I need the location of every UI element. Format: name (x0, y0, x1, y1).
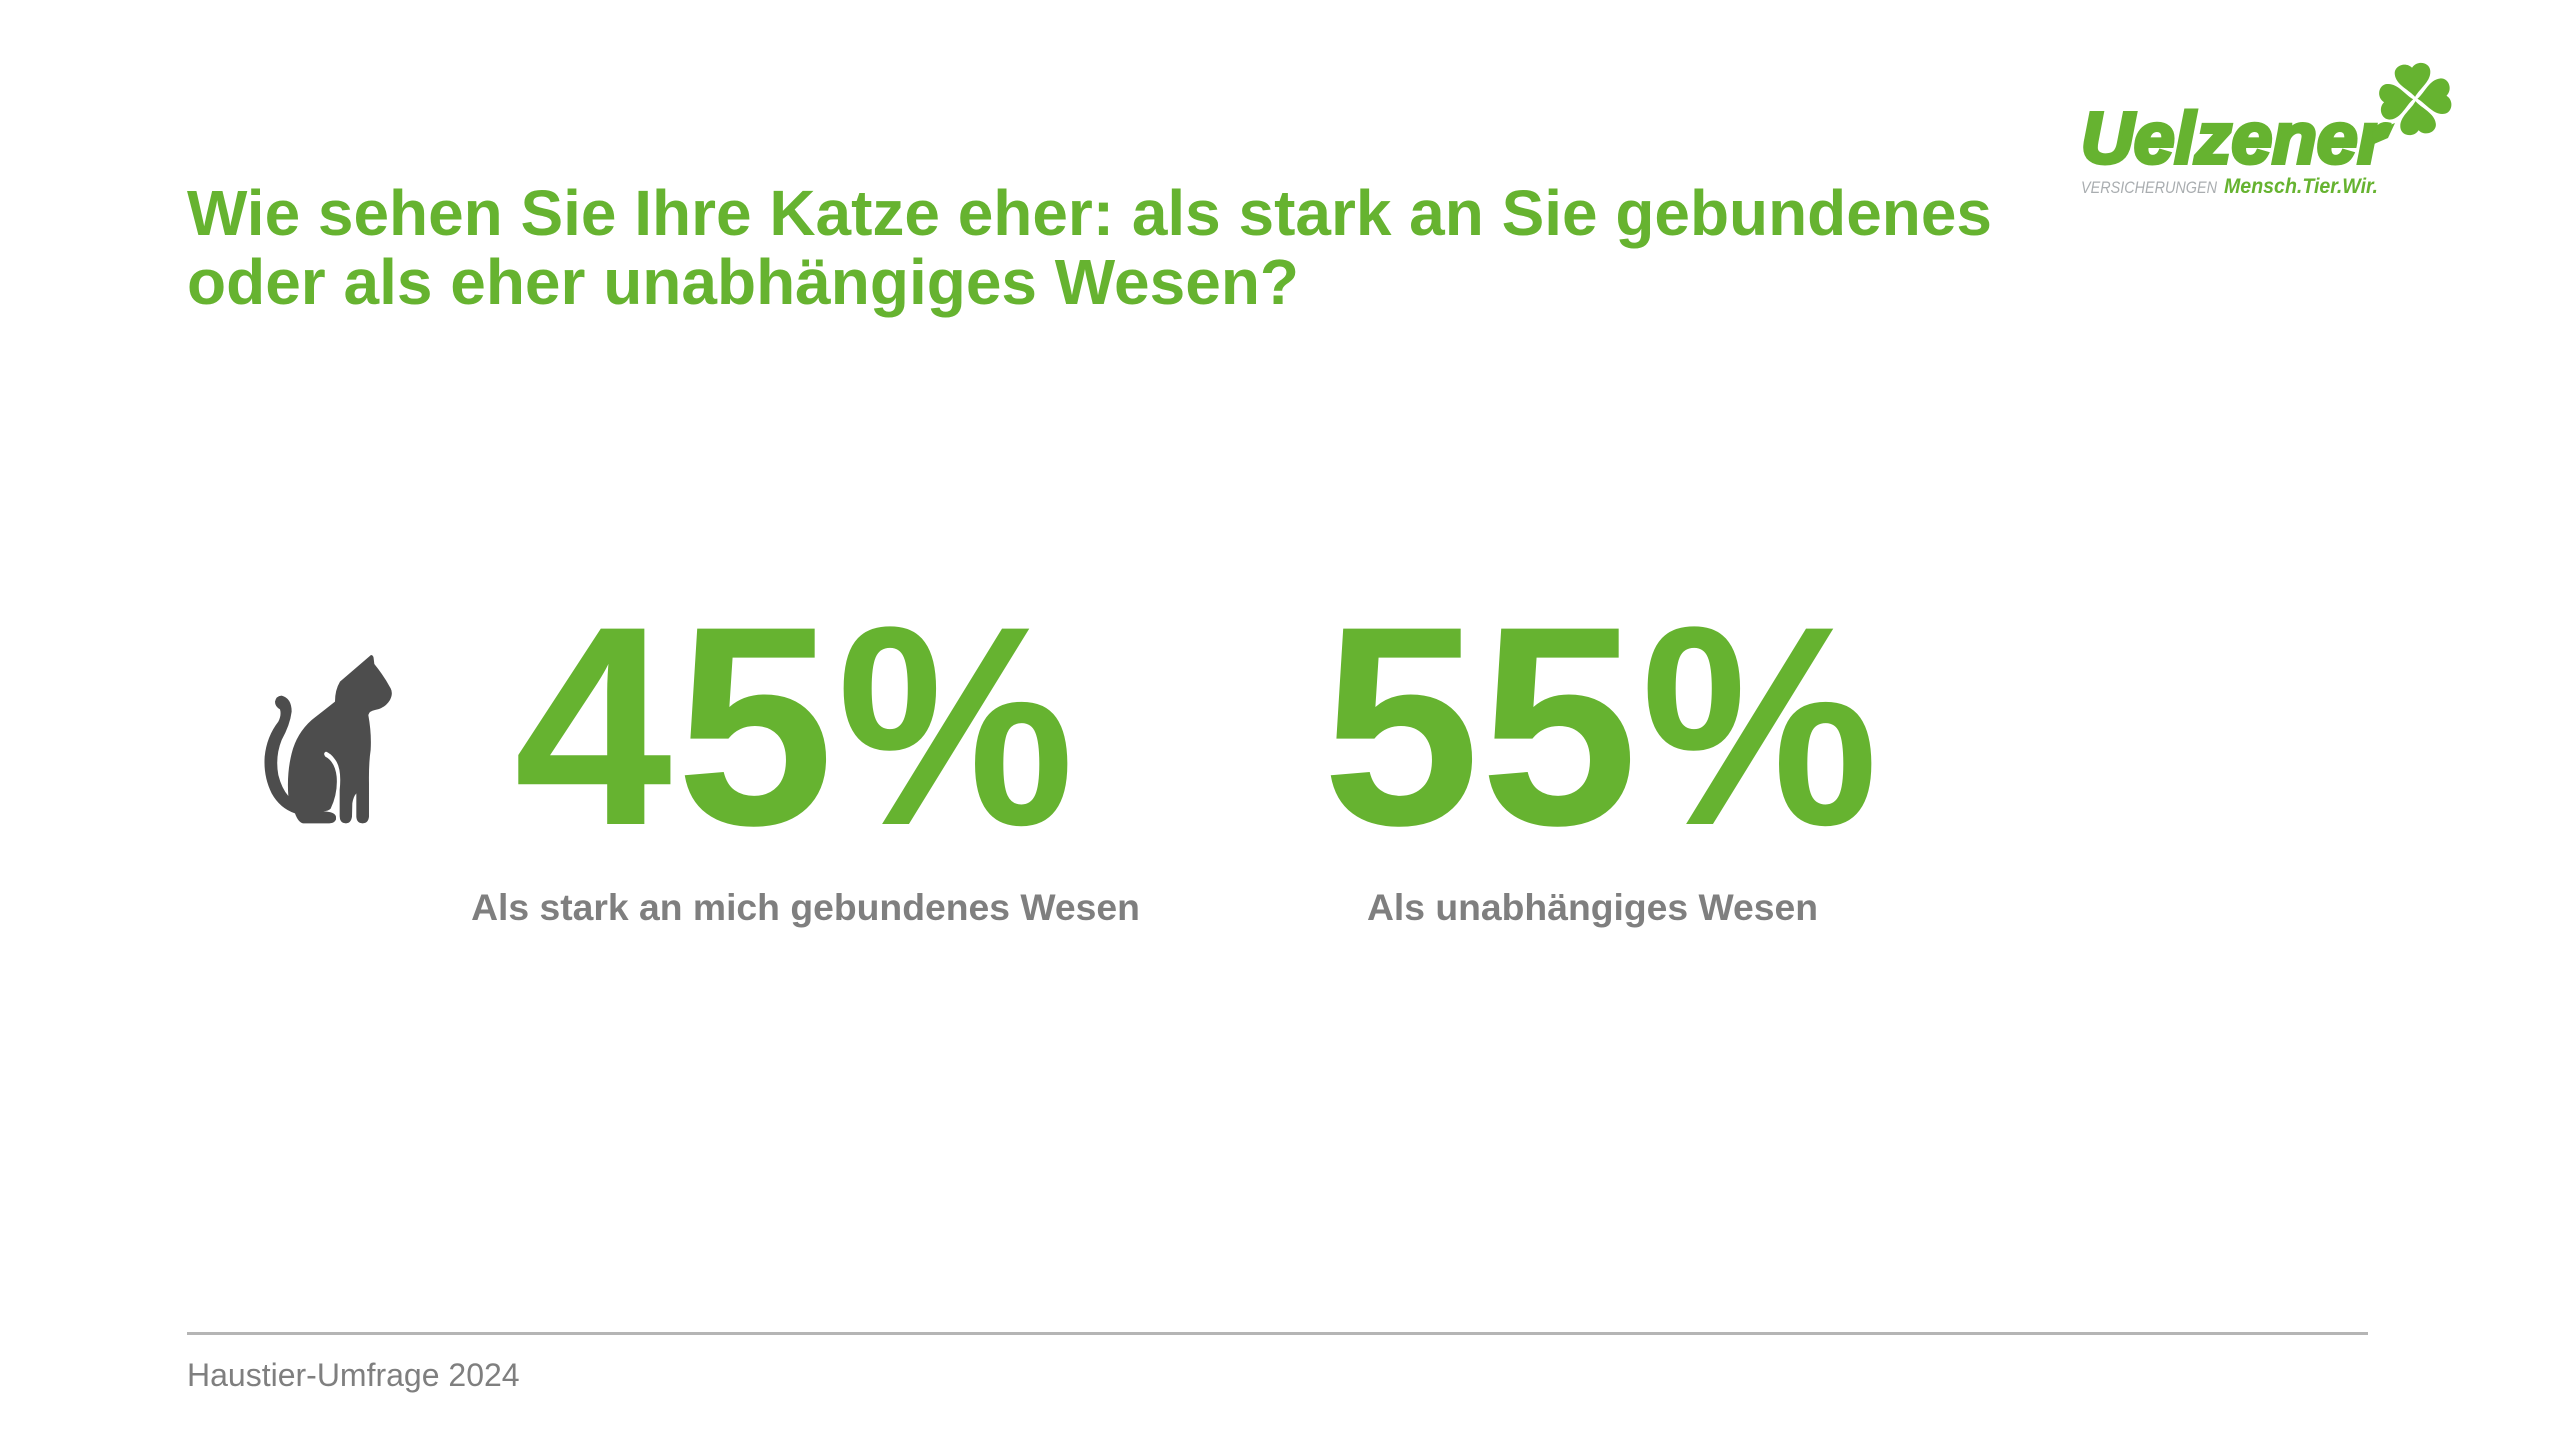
logo: Uelzener (2081, 62, 2452, 198)
label 55%: Als unabhängiges Wesen (1367, 886, 1818, 928)
value 45%: % (837, 567, 1074, 885)
logo tagline (2081, 175, 2378, 198)
title: Wie sehen Sie Ihre Katze eher: als stark an Sie gebundenes (187, 177, 1992, 249)
logo tagline: Mensch.Tier.Wir. (2224, 175, 2378, 198)
value 55%: % (1641, 567, 1878, 885)
value 55% (1322, 567, 1878, 885)
statistic: 55% (1322, 567, 1878, 928)
title (187, 177, 1992, 318)
label 45%: Als stark an mich gebundenes Wesen (471, 886, 1140, 928)
value 55%: 5 (1322, 568, 1480, 885)
logo wordmark: Uelzener (2081, 99, 2390, 179)
footer source: Haustier-Umfrage 2024 (187, 1357, 520, 1393)
icon: clover (2378, 62, 2452, 136)
value 55%: 5 (1480, 568, 1638, 885)
icon: cat (264, 655, 392, 824)
value 45%: 4 (514, 568, 674, 885)
value 45% (514, 567, 1074, 885)
title: oder als eher unabhängiges Wesen? (187, 246, 1299, 318)
statistic: 45% (471, 567, 1140, 928)
value 45%: 5 (676, 568, 834, 885)
logo tagline: VERSICHERUNGEN (2081, 178, 2218, 197)
